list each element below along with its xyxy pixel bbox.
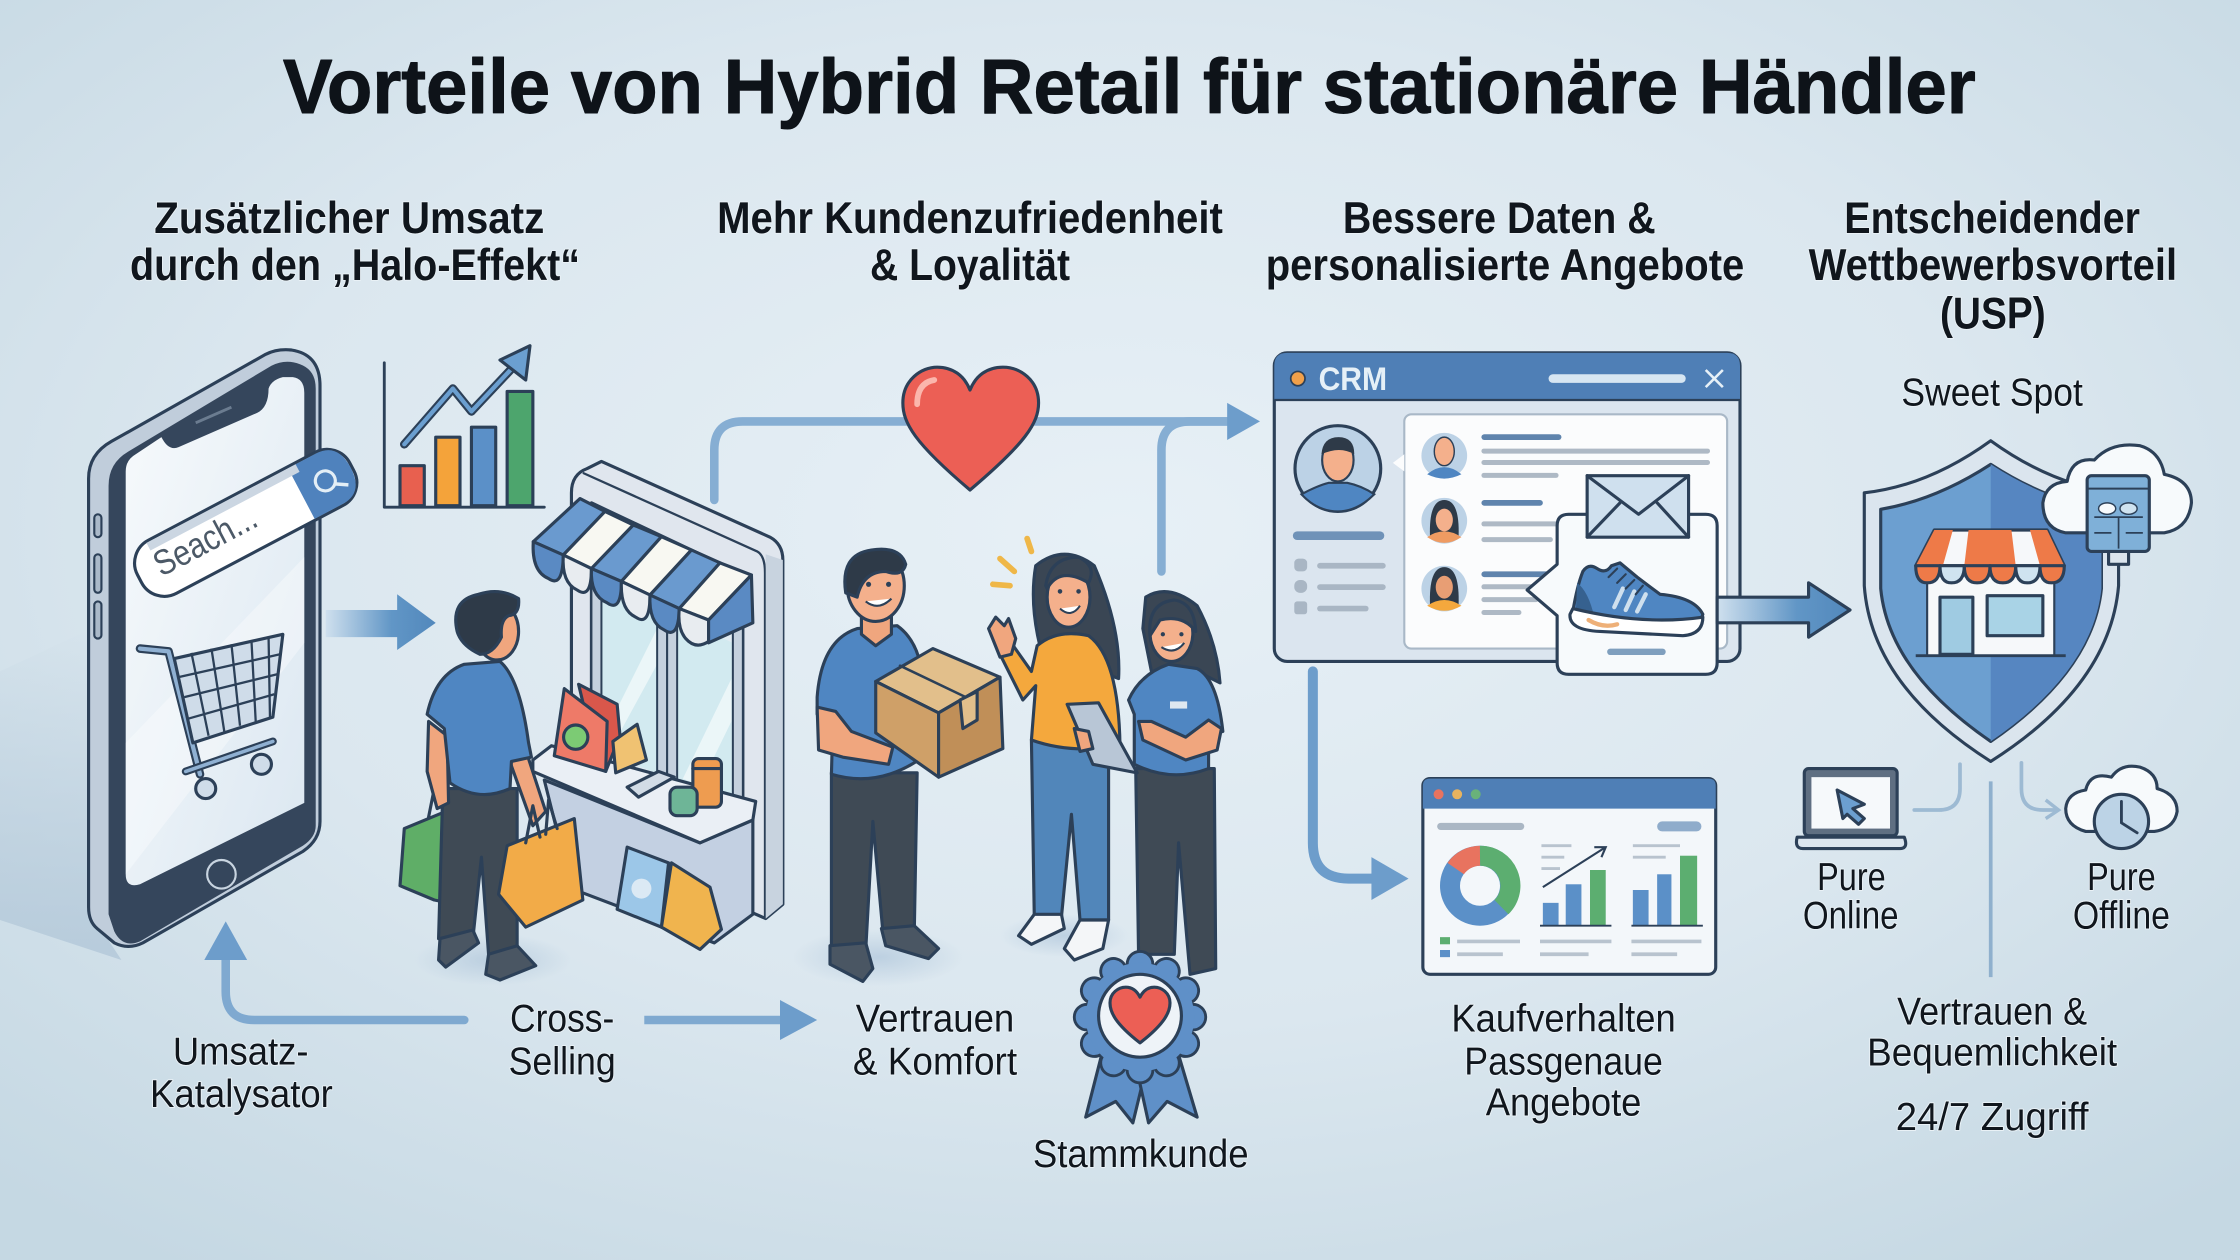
customer list panel — [1404, 414, 1727, 649]
heading: Bessere Daten: Bessere Daten & — [1343, 194, 1656, 243]
heading: Zusätzlicher Umsatz — [130, 194, 580, 290]
label: Vertrauen und Komfort: Vertrauen — [856, 997, 1014, 1040]
label: Umsatz-Katalysator — [150, 1030, 333, 1116]
label: Pure Offline: Pure — [2087, 856, 2156, 899]
heading: Wettbewerbsvorteil: (USP) — [1940, 290, 2046, 339]
icon: shopping cart — [140, 634, 283, 799]
store in shield — [1916, 530, 2066, 656]
products on counter — [554, 684, 721, 949]
icon: search bar — [126, 440, 366, 605]
CRM window: CRM — [1319, 360, 1387, 397]
heading: Zusätzlicher Umsatz: Zusätzlicher Umsatz — [154, 194, 544, 243]
arrow: cross-selling back to phone — [204, 921, 464, 1020]
label: Kaufverhalten: Angebote — [1486, 1082, 1641, 1125]
second small bar chart — [1631, 846, 1703, 926]
label: Cross-Selling — [509, 997, 616, 1083]
label: Vertrauen und Bequemlichkeit: Vertrauen & — [1897, 990, 2087, 1033]
label: Vertrauen und Komfort: & Komfort — [853, 1040, 1017, 1083]
label: Cross-Selling: Selling — [509, 1040, 616, 1083]
legs — [439, 789, 517, 954]
label: Sweet Spot: Sweet Spot — [1901, 372, 2083, 415]
label: Pure Offline — [2073, 856, 2170, 938]
icon: running shoe — [1570, 563, 1703, 636]
icon: heart — [903, 367, 1039, 490]
icon: shield with store — [1864, 441, 2119, 761]
heading: Kundenzufriedenheit: Mehr Kundenzufriedenheit — [717, 194, 1223, 243]
icon: loyalty badge — [1074, 951, 1206, 1123]
CRM window — [1274, 353, 1740, 661]
label: Umsatz-Katalysator: Katalysator — [150, 1073, 333, 1116]
green bag — [400, 811, 449, 903]
bar chart with rising arrow — [384, 346, 544, 507]
heading: Wettbewerbsvorteil: Entscheidender — [1844, 194, 2140, 243]
icon: cloud with web page — [2043, 445, 2191, 564]
label: Kaufverhalten: Kaufverhalten — [1451, 997, 1676, 1040]
label: Pure Online: Pure — [1817, 856, 1886, 899]
heading: Kundenzufriedenheit: & Loyalität — [870, 241, 1070, 290]
heading: Zusätzlicher Umsatz: durch den „Halo-Effekt“ — [130, 241, 580, 290]
illustration: store front — [533, 461, 783, 949]
label: Pure Offline: Offline — [2073, 895, 2170, 938]
illustration: woman in yellow — [989, 539, 1129, 960]
arrow: upper flow to CRM — [714, 403, 1260, 571]
icon: phone — [89, 350, 320, 946]
heading: Bessere Daten — [1266, 194, 1744, 290]
sparks — [993, 539, 1031, 586]
label: Vertrauen und Bequemlichkeit — [1867, 990, 2117, 1075]
illustration: customer with shopping bags — [400, 592, 583, 986]
frame — [571, 461, 783, 919]
arrow: phone to store — [326, 594, 436, 650]
icon: search bar: Seach... — [147, 497, 264, 584]
awning — [533, 499, 753, 645]
label: Vertrauen und Bequemlichkeit: Bequemlichkeit — [1867, 1032, 2117, 1075]
arrow: CRM to shield — [1717, 583, 1850, 637]
arrow: cross-selling to trust — [644, 1000, 817, 1040]
label: 24/7 Zugriff: 24/7 Zugriff — [1896, 1096, 2089, 1139]
label: Pure Online: Online — [1803, 895, 1899, 938]
customer avatar — [1295, 426, 1381, 511]
orange bag — [499, 819, 583, 927]
arrow: CRM to dashboard — [1313, 671, 1409, 900]
title: Vorteile von Hybrid Retail für stationäre Händler — [283, 44, 1976, 130]
analytics dashboard — [1423, 779, 1716, 974]
glass — [601, 583, 733, 803]
shirt — [427, 661, 531, 795]
label: Cross-Selling: Cross- — [510, 997, 614, 1040]
icon: laptop — [1796, 769, 1906, 849]
phone cast shadow — [0, 629, 121, 960]
label: Stammkunde: Stammkunde — [1033, 1133, 1249, 1176]
illustration: customer with parcel — [793, 549, 964, 986]
heading: Wettbewerbsvorteil — [1809, 194, 2177, 339]
side list — [1293, 531, 1386, 614]
heading: Wettbewerbsvorteil: Wettbewerbsvorteil — [1809, 241, 2177, 290]
label: Kaufverhalten — [1451, 997, 1676, 1125]
label: Vertrauen und Komfort — [853, 997, 1017, 1083]
illustration: sales assistant with tablet — [1067, 592, 1223, 974]
heading: Bessere Daten: personalisierte Angebote — [1266, 241, 1744, 290]
connector lines below shield — [1914, 763, 2059, 977]
arms — [427, 721, 449, 809]
icon: parcel box — [876, 649, 1003, 777]
heading: Kundenzufriedenheit — [717, 194, 1223, 290]
icon: cloud with clock — [2066, 766, 2177, 849]
icon: envelope — [1587, 476, 1689, 537]
donut chart — [1450, 856, 1510, 916]
product offer card with shoe — [1527, 476, 1717, 674]
head — [476, 603, 519, 660]
label: Umsatz-Katalysator: Umsatz- — [173, 1030, 309, 1073]
small bar chart with arrow — [1540, 846, 1611, 926]
counter — [544, 780, 753, 943]
label: Pure Online — [1803, 856, 1899, 938]
label: Kaufverhalten: Passgenaue — [1464, 1040, 1663, 1083]
